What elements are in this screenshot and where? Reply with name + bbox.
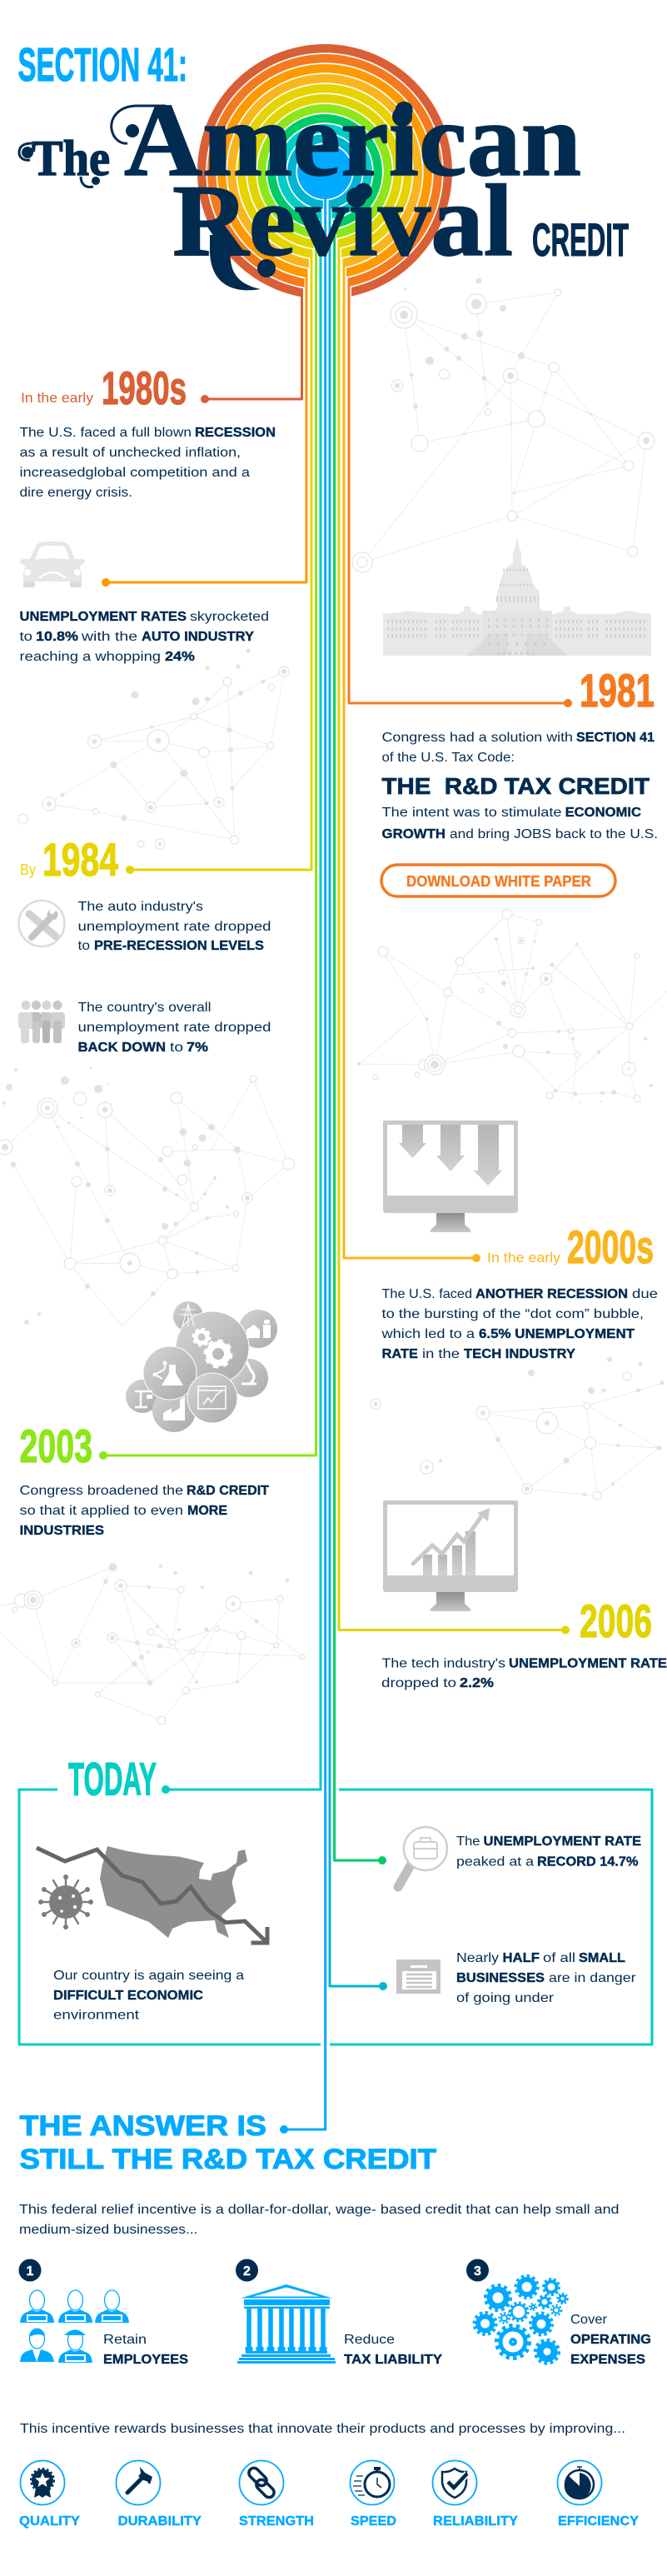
benefit 3: cover operating expenses: OPERATING [570, 2333, 651, 2347]
title: American [124, 82, 581, 198]
intro paragraph: This federal relief incentive is a dollar-for-dollar, wage- based credit that can help small and [19, 2203, 620, 2217]
network background: left of 1984 [18, 648, 289, 849]
icon: monitor with rising chart [383, 1500, 518, 1611]
1981 text: GROWTH [381, 827, 445, 841]
today left text: Our country is again seeing a [53, 1969, 244, 1983]
overall unemployment text: The country's overall [78, 1001, 212, 1015]
today heading: TODAY [68, 1753, 157, 1805]
2006 text: 2.2% [460, 1676, 494, 1690]
button: download white paper [381, 865, 615, 896]
2000s text: due [632, 1287, 658, 1301]
1984 heading: 1984 [42, 833, 118, 886]
benefit 3: cover operating expenses: Cover [570, 2313, 608, 2327]
button: download white paper: DOWNLOAD WHITE PAPER [406, 873, 591, 890]
intro paragraph [19, 2203, 620, 2237]
icon: monitor with falling arrows [383, 1121, 518, 1232]
network background: above today [0, 1563, 305, 1725]
1981 text: Congress had a solution with [381, 731, 573, 745]
icon and label: strength [239, 2461, 314, 2529]
2003 text: Congress broadened the [20, 1484, 183, 1498]
unemployment text: skyrocketed [190, 610, 269, 624]
1981 text: of the U.S. Tax Code: [381, 751, 515, 765]
icon and label: quality [19, 2461, 80, 2529]
2003 text [20, 1484, 269, 1538]
2003 text: so that it applied to even [20, 1504, 183, 1518]
benefit 1: retain employees: Retain [103, 2333, 147, 2347]
icon: virus [38, 1875, 93, 1930]
2000s heading [487, 1221, 654, 1273]
auto industry text: unemployment rate dropped [78, 920, 271, 934]
auto industry text: to [78, 939, 90, 953]
2006 text: UNEMPLOYMENT RATE [509, 1656, 667, 1671]
2000s text: TECH INDUSTRY [464, 1347, 575, 1361]
icon: magnifier with briefcase [398, 1827, 447, 1887]
1980s heading [21, 362, 187, 414]
title: The [32, 131, 110, 186]
auto industry text [78, 900, 271, 953]
icon and label: strength: STRENGTH [239, 2514, 314, 2529]
incentive sentence: This incentive rewards businesses that innovate their products and processes by improving... [20, 2422, 625, 2436]
icon: capitol building [383, 536, 651, 656]
benefit 3: cover operating expenses: EXPENSES [570, 2353, 645, 2367]
2006 text: dropped to [381, 1676, 456, 1690]
heading: the answer [20, 2110, 436, 2175]
2006 text [381, 1656, 667, 1690]
benefit 1: retain employees [18, 2259, 188, 2367]
benefit 1: retain employees: EMPLOYEES [103, 2353, 188, 2367]
record unemployment text: The [456, 1835, 480, 1849]
section 41 heading: SECTION 41: [18, 38, 187, 92]
unemployment text: AUTO INDUSTRY [142, 630, 254, 644]
small businesses text: are in danger [549, 1971, 636, 1985]
benefit 3: cover operating expenses: 3 [474, 2264, 481, 2279]
1980s text: dire energy crisis. [20, 486, 132, 500]
1980s heading: In the early [21, 390, 94, 406]
benefit 2: reduce tax liability: Reduce [344, 2333, 395, 2347]
2000s text [381, 1287, 658, 1361]
2000s text: in the [422, 1347, 460, 1361]
record unemployment text [456, 1835, 641, 1870]
2006 text: The tech industry's [381, 1656, 505, 1671]
1981 text: SECTION 41 [576, 731, 655, 745]
heading: the answer: THE ANSWER IS [20, 2110, 266, 2142]
small businesses text [456, 1951, 636, 2005]
icon: people [18, 1001, 65, 1043]
2000s text: to the bursting of the “dot com” bubble, [381, 1307, 644, 1321]
1980s text: RECESSION [195, 426, 276, 440]
icon and label: reliability: RELIABILITY [433, 2514, 518, 2529]
unemployment text [20, 610, 269, 664]
connector dots [99, 395, 572, 2134]
2003 text: INDUSTRIES [20, 1524, 104, 1538]
unemployment text: UNEMPLOYMENT RATES [20, 610, 187, 624]
2003 text: MORE [187, 1504, 227, 1518]
benefit 2: reduce tax liability: 2 [243, 2264, 251, 2279]
icon and label: efficiency [558, 2461, 639, 2529]
overall unemployment text: unemployment rate dropped [78, 1021, 271, 1035]
icon and label: speed [350, 2461, 396, 2529]
today left text: DIFFICULT ECONOMIC [53, 1989, 203, 2003]
unemployment text: 24% [165, 650, 195, 664]
benefit 2: reduce tax liability: TAX LIABILITY [344, 2353, 442, 2367]
map: United States with falling line [37, 1846, 267, 1943]
1981 text: ECONOMIC [565, 806, 641, 820]
small businesses text: Nearly [456, 1951, 499, 1965]
small businesses text: of all [543, 1951, 575, 1965]
1980s text: increasedglobal competition and a [20, 466, 250, 480]
today left text [53, 1969, 244, 2023]
record unemployment text: peaked at a [456, 1855, 534, 1870]
1980s text [20, 426, 276, 500]
2000s heading: In the early [487, 1250, 561, 1266]
small businesses text: BUSINESSES [456, 1971, 545, 1985]
overall unemployment text [78, 1001, 271, 1055]
today left text: environment [53, 2008, 140, 2023]
2000s text: ANOTHER RECESSION [475, 1287, 628, 1301]
1981 text: THE R&D TAX CREDIT [381, 773, 650, 799]
icon: tools [18, 901, 65, 946]
icon and label: efficiency: EFFICIENCY [558, 2514, 639, 2529]
2000s text: RATE [381, 1347, 418, 1361]
rainbow rings and timeline lines [103, 44, 568, 2129]
1980s text: as a result of unchecked inflation, [20, 446, 241, 460]
1984 heading [20, 833, 118, 886]
overall unemployment text: 7% [187, 1041, 208, 1055]
intro paragraph: medium-sized businesses... [19, 2223, 198, 2237]
2003 heading: 2003 [20, 1420, 92, 1472]
1981 text: The intent was to stimulate [381, 806, 562, 820]
2000s text: 6.5% UNEMPLOYMENT [479, 1327, 635, 1341]
overall unemployment text: to [170, 1041, 183, 1055]
icon and label: reliability [433, 2461, 518, 2529]
title [19, 82, 629, 290]
record unemployment text: RECORD 14.7% [537, 1855, 638, 1870]
network background: top right [352, 278, 655, 572]
network background: above 2003 [0, 1066, 295, 1326]
icon: closed shop [396, 1959, 441, 1994]
2000s text: The U.S. faced [381, 1287, 472, 1301]
unemployment text: reaching a whopping [20, 650, 161, 664]
1980s text: The U.S. faced a full blown [20, 426, 192, 440]
icon and label: speed: SPEED [351, 2514, 396, 2529]
overall unemployment text: BACK DOWN [78, 1041, 166, 1055]
1981 text [381, 731, 658, 841]
heading: the answer: STILL THE R&D TAX CREDIT [20, 2144, 436, 2175]
record unemployment text: UNEMPLOYMENT RATE [483, 1835, 641, 1849]
benefit 1: retain employees: 1 [27, 2264, 34, 2279]
small businesses text: HALF [503, 1951, 540, 1965]
benefit 3: cover operating expenses [466, 2259, 651, 2367]
1984 heading: By [20, 861, 36, 878]
1981 text: and bring JOBS back to the U.S. [450, 827, 658, 841]
network background: below download button [357, 909, 667, 1103]
unemployment text: to [20, 630, 32, 644]
unemployment text: with the [81, 630, 137, 644]
auto industry text: The auto industry's [78, 900, 203, 914]
auto industry text: PRE-RECESSION LEVELS [94, 939, 264, 953]
2003 text: R&D CREDIT [187, 1484, 269, 1498]
title: Revival [172, 163, 513, 277]
panel: today box [19, 1790, 652, 2044]
unemployment text: 10.8% [36, 630, 78, 644]
1980s heading: 1980s [102, 362, 187, 414]
benefit 2: reduce tax liability [236, 2259, 442, 2367]
icon and label: durability: DURABILITY [118, 2514, 202, 2529]
icon: industry cluster [126, 1301, 277, 1432]
small businesses text: of going under [456, 1991, 555, 2005]
icon: broken car [20, 542, 85, 587]
2000s text: which led to a [381, 1327, 475, 1341]
network background: below 2000s text [371, 1357, 665, 1500]
small businesses text: SMALL [579, 1951, 625, 1965]
icon and label: durability [117, 2461, 202, 2529]
icon and label: quality: QUALITY [19, 2514, 80, 2529]
